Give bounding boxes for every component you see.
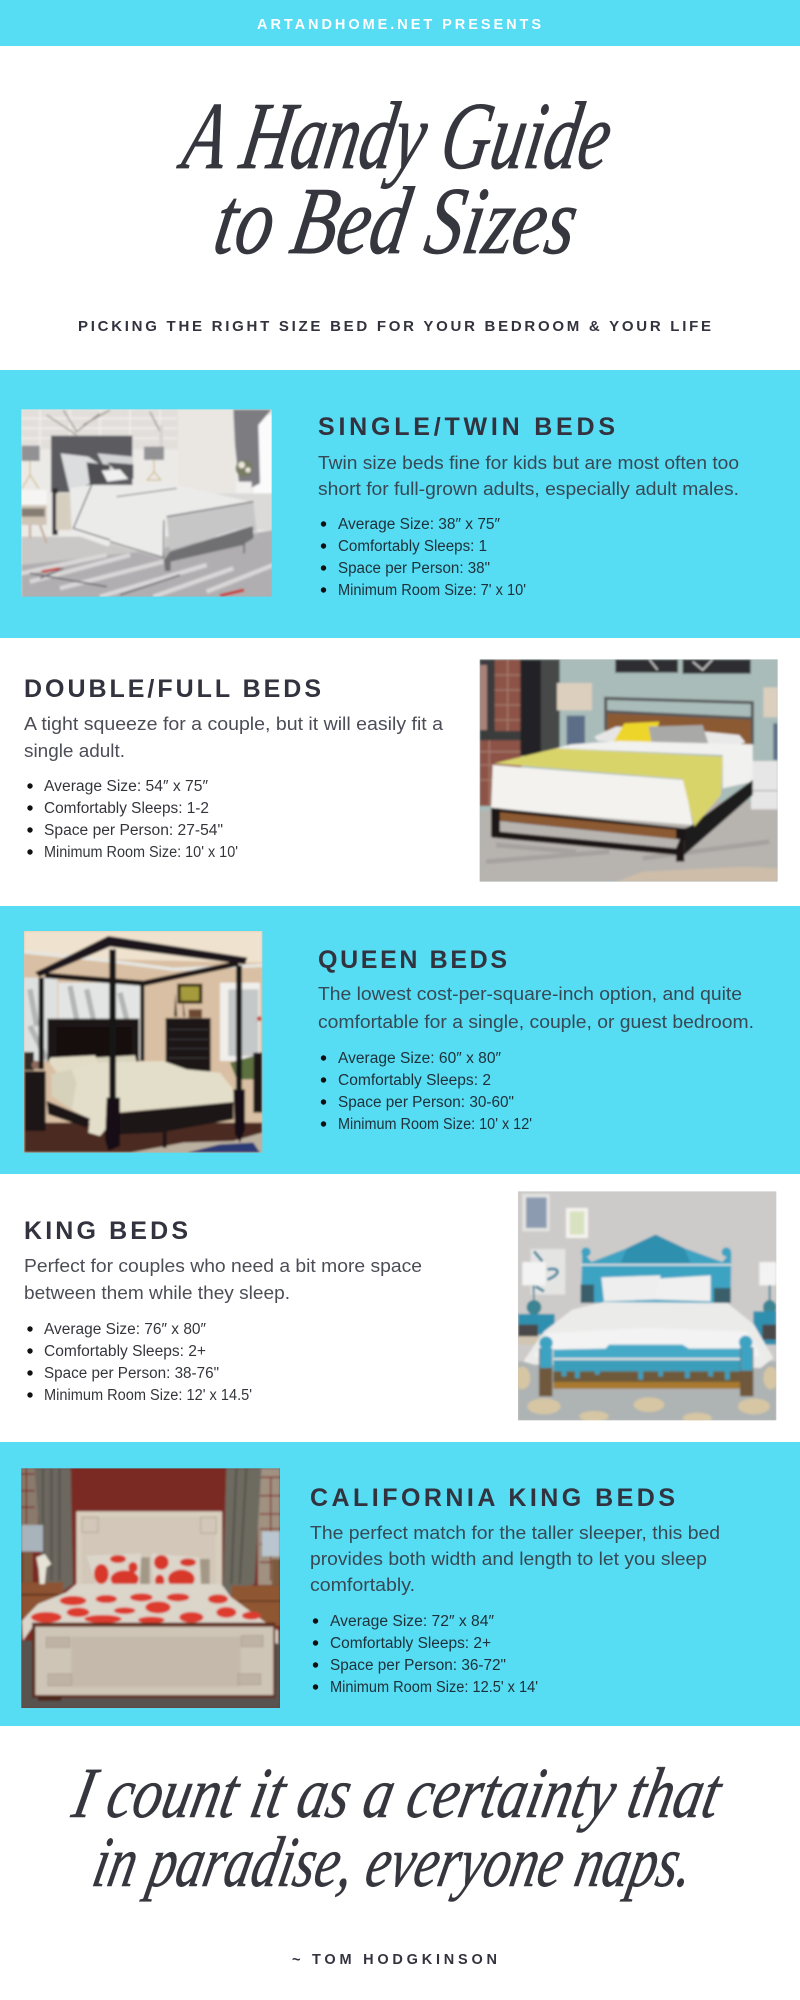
description: [318, 984, 754, 1032]
panel: single/twin beds: [0, 370, 800, 638]
description: [310, 1523, 720, 1595]
description: The lowest cost-per-square-inch option, and quite: [318, 984, 742, 1004]
heading: CALIFORNIA KING BEDS: [310, 1484, 675, 1512]
subtitle: PICKING THE RIGHT SIZE BED FOR YOUR BEDROOM & YOUR LIFE: [78, 318, 711, 335]
photo: double bed: [476, 655, 779, 885]
facts list: Minimum Room Size: 12.5' x 14': [330, 1679, 538, 1696]
panel: california king beds: [0, 1442, 800, 1726]
heading: SINGLE/TWIN BEDS: [318, 413, 615, 441]
description: short for full-grown adults, especially adult males.: [318, 479, 739, 499]
title: [172, 83, 620, 274]
facts list: Space per Person: 38": [338, 560, 490, 577]
description: comfortably.: [310, 1575, 415, 1595]
description: [24, 1256, 422, 1303]
facts list: [321, 1050, 532, 1133]
facts list: Minimum Room Size: 10' x 12': [338, 1116, 532, 1133]
description: [24, 714, 444, 761]
facts list: Comfortably Sleeps: 2+: [330, 1635, 491, 1652]
facts list: Minimum Room Size: 10' x 10': [44, 844, 238, 861]
facts list: Space per Person: 38-76": [44, 1365, 219, 1382]
description: A tight squeeze for a couple, but it will easily fit a: [24, 714, 444, 734]
photo: california king bed: [18, 1464, 285, 1711]
facts list: Minimum Room Size: 12' x 14.5': [44, 1387, 252, 1404]
quote attribution: ~ TOM HODGKINSON: [292, 1952, 497, 1968]
description: The perfect match for the taller sleeper, this bed: [310, 1523, 720, 1543]
facts list: Space per Person: 27-54": [44, 822, 223, 839]
panel: double/full beds: [24, 655, 779, 885]
facts list: Comfortably Sleeps: 1-2: [44, 800, 209, 817]
description: [318, 453, 739, 499]
panel: queen beds: [0, 906, 800, 1174]
facts list: Average Size: 76″ x 80″: [44, 1321, 207, 1338]
facts list: [27, 1321, 252, 1404]
photo: single bed: [20, 405, 273, 598]
facts list: Average Size: 54″ x 75″: [44, 778, 209, 795]
facts list: Space per Person: 36-72": [330, 1657, 506, 1674]
photo: king bed: [514, 1188, 781, 1423]
facts list: Comfortably Sleeps: 1: [338, 538, 487, 555]
facts list: Space per Person: 30-60": [338, 1094, 514, 1111]
top banner: ARTANDHOME.NET PRESENTS: [257, 17, 541, 33]
description: Perfect for couples who need a bit more space: [24, 1256, 422, 1276]
description: Twin size beds fine for kids but are most often too: [318, 453, 739, 473]
facts list: [27, 778, 238, 861]
facts list: Minimum Room Size: 7' x 10': [338, 582, 526, 599]
top banner: [0, 0, 800, 46]
facts list: Average Size: 72″ x 84″: [330, 1613, 495, 1630]
facts list: Comfortably Sleeps: 2+: [44, 1343, 206, 1360]
facts list: [321, 516, 526, 599]
quote: [66, 1753, 730, 1902]
heading: KING BEDS: [24, 1217, 188, 1245]
facts list: [313, 1613, 538, 1696]
description: comfortable for a single, couple, or guest bedroom.: [318, 1012, 754, 1032]
description: single adult.: [24, 741, 125, 761]
heading: DOUBLE/FULL BEDS: [24, 675, 321, 703]
facts list: Average Size: 38″ x 75″: [338, 516, 501, 533]
description: provides both width and length to let you sleep: [310, 1549, 707, 1569]
photo: queen bed: [20, 926, 267, 1156]
facts list: Comfortably Sleeps: 2: [338, 1072, 491, 1089]
panel: king beds: [24, 1188, 781, 1423]
facts list: Average Size: 60″ x 80″: [338, 1050, 502, 1067]
title: A Handy Guide: [172, 83, 620, 189]
title: to Bed Sizes: [207, 168, 586, 274]
heading: QUEEN BEDS: [318, 946, 507, 974]
description: between them while they sleep.: [24, 1283, 290, 1303]
